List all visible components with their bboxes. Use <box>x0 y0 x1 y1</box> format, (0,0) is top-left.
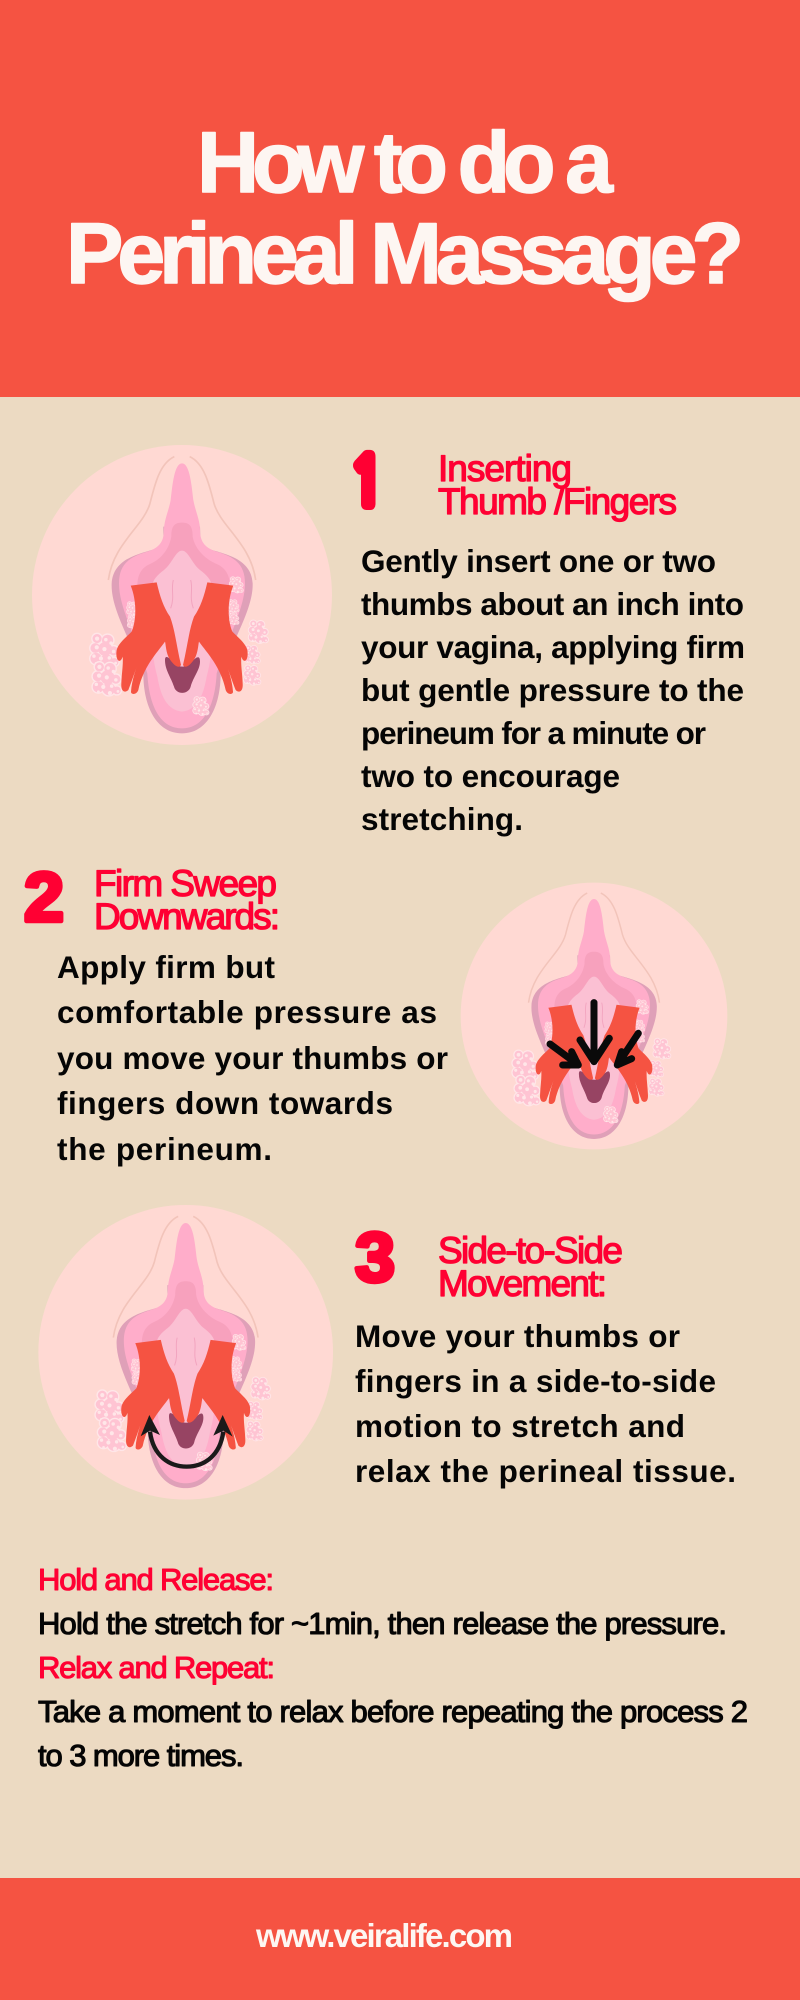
title <box>66 115 744 302</box>
step 2 heading: Downwards: <box>94 896 280 937</box>
illustration: step 3 with curved arrow <box>38 1205 333 1500</box>
step 1 description: Gently insert one or two <box>361 543 716 579</box>
step 3 description: relax the perineal tissue. <box>355 1453 736 1489</box>
step 3 description: Move your thumbs or <box>355 1318 680 1354</box>
header band <box>0 0 800 397</box>
step 3 heading <box>438 1230 623 1304</box>
website url: www.veiralife.com <box>255 1917 513 1954</box>
step 2 description: you move your thumbs or <box>57 1040 448 1076</box>
step 3 description: motion to stretch and <box>355 1408 685 1444</box>
step 1 description <box>361 543 745 837</box>
step 1 description: two to encourage <box>361 758 620 794</box>
step 1 heading: Thumb /Fingers <box>438 481 677 522</box>
step 2 heading <box>94 863 280 937</box>
step 1 description: perineum for a minute or <box>361 715 706 751</box>
step 2 description <box>57 949 448 1167</box>
step 1 number: 1 <box>350 449 384 515</box>
hold and release heading: Hold and Release: <box>38 1562 274 1597</box>
relax and repeat text: to 3 more times. <box>38 1738 244 1773</box>
illustration: step 1 hands and anatomy <box>32 445 332 745</box>
footer band <box>0 1878 800 2000</box>
step 1 description: your vagina, applying firm <box>361 629 745 665</box>
step 2 heading: Firm Sweep <box>94 863 277 904</box>
step 3 heading: Side-to-Side <box>438 1230 623 1271</box>
step 3 heading: Movement: <box>438 1263 607 1304</box>
hold and release text: Hold the stretch for ~1min, then release the pressure. <box>38 1606 727 1641</box>
relax and repeat text <box>38 1694 748 1773</box>
arrows: downward sweep <box>550 1003 638 1065</box>
title: Perineal Massage? <box>66 206 744 302</box>
step 1 heading: Inserting <box>438 448 572 489</box>
illustration: step 2 with downward arrows <box>461 883 727 1149</box>
step 1 description: but gentle pressure to the <box>361 672 744 708</box>
step 1 heading <box>438 448 677 522</box>
closing notes <box>38 1562 748 1773</box>
arrow: side-to-side curve <box>141 1415 233 1467</box>
step 2 number: 2 <box>24 858 64 936</box>
title: How to do a <box>197 115 614 211</box>
step 3 description <box>355 1318 736 1489</box>
step 1 description: stretching. <box>361 801 523 837</box>
step 1 description: thumbs about an inch into <box>361 586 744 622</box>
step 2 description: the perineum. <box>57 1131 272 1167</box>
step 2 description: Apply firm but <box>57 949 276 985</box>
relax and repeat heading: Relax and Repeat: <box>38 1650 275 1685</box>
step 3 description: fingers in a side-to-side <box>355 1363 716 1399</box>
step 2 description: fingers down towards <box>57 1085 393 1121</box>
step 2 description: comfortable pressure as <box>57 994 437 1030</box>
relax and repeat text: Take a moment to relax before repeating the process 2 <box>38 1694 748 1729</box>
step 3 number: 3 <box>355 1218 395 1296</box>
